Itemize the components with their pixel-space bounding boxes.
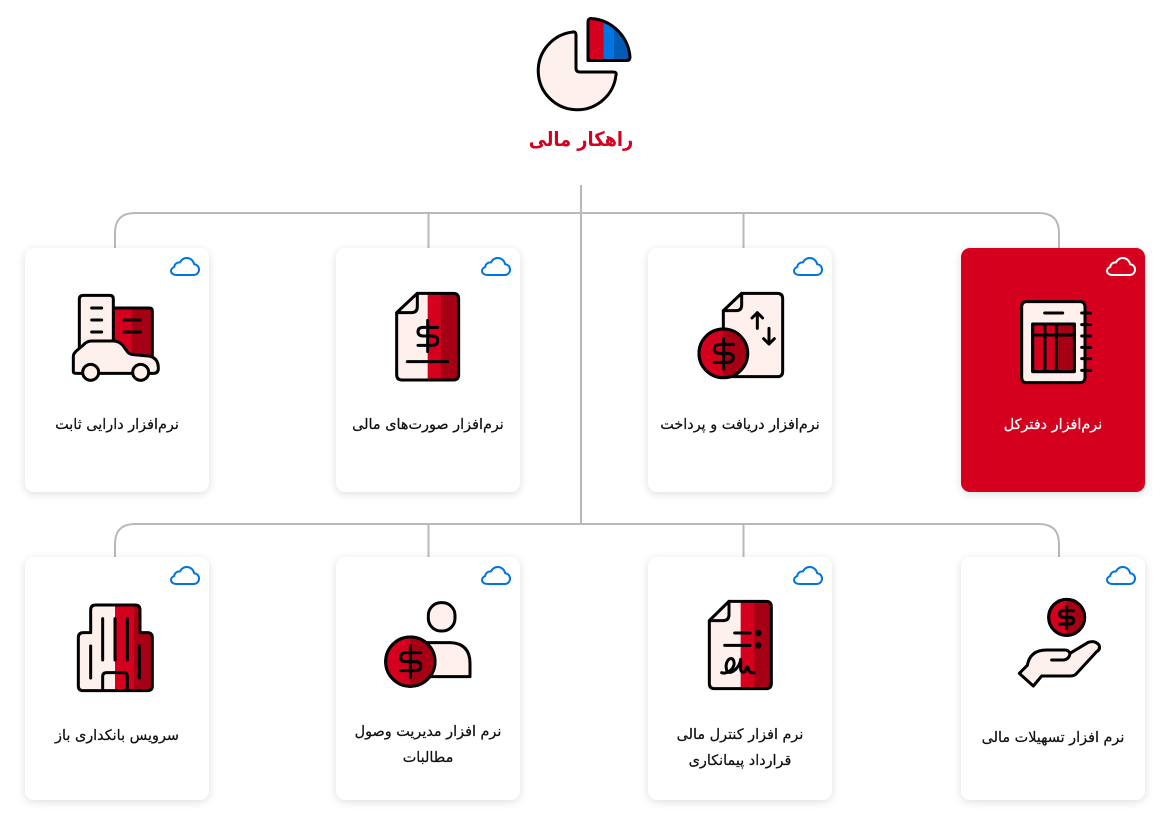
icon: pie chart [536,17,632,112]
label: قرارداد پیمانکاری [689,753,791,769]
label: نرم افزار تسهیلات مالی [982,730,1124,746]
label: سرویس بانکداری باز [55,728,179,744]
icon: cloud [793,566,823,585]
panel: open banking service [25,557,209,800]
label: نرم‌افزار دریافت و پرداخت [660,417,820,433]
label [677,727,803,769]
icon: document with coin and arrows [698,292,784,380]
label: مطالبات [403,750,453,766]
panel: financial facilities software [961,557,1145,800]
icon: financial document [395,292,460,382]
label: نرم‌افزار دارایی ثابت [55,417,179,433]
icon: bank building [76,604,154,692]
icon: cloud [170,566,200,585]
icon: cloud [481,566,511,585]
label [355,724,501,766]
label: نرم‌افزار دفترکل [1004,417,1102,433]
panel: financial statements software [336,248,520,492]
label: نرم افزار مدیریت وصول [355,724,501,740]
panel: general ledger software [961,248,1145,492]
icon: buildings and car [72,294,160,382]
icon: cloud [1106,257,1136,276]
icon: cloud [1106,566,1136,585]
panel: receivables management software [336,557,520,800]
label: نرم افزار کنترل مالی [677,727,803,743]
panel: receipts and payments software [648,248,832,492]
panel: financial control and contracting software [648,557,832,800]
title: راهکار مالی [529,127,633,151]
icon: hand with coin [1018,598,1101,688]
icon: cloud [481,257,511,276]
icon: cloud [793,257,823,276]
label: نرم‌افزار صورت‌های مالی [352,417,504,433]
panel: fixed assets software [25,248,209,492]
icon: cloud [170,257,200,276]
icon: signed contract [708,600,773,690]
icon: person with coin [384,601,472,688]
icon: ledger notebook [1020,300,1092,384]
